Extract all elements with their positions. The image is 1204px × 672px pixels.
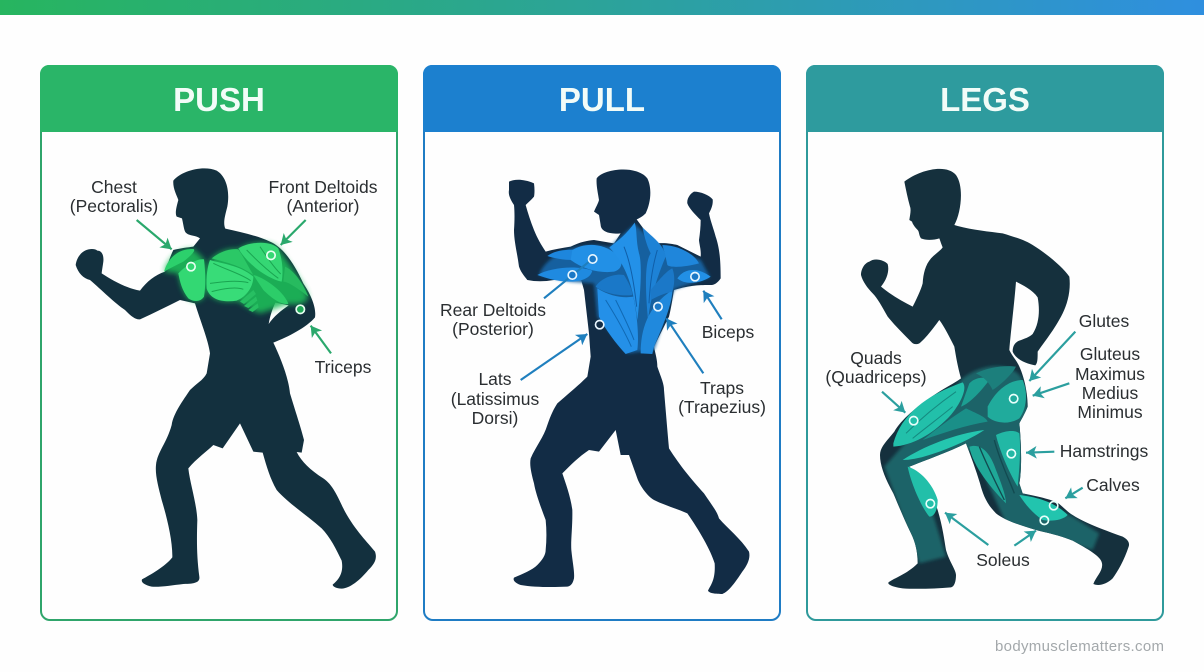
muscle glow (164, 243, 308, 313)
arrow: biceps (703, 291, 722, 319)
label: gluteus group: Maximus (1075, 364, 1145, 384)
arrow: triceps (311, 326, 331, 353)
label: quads: (Quadriceps) (825, 367, 927, 387)
panel: legs (806, 65, 1164, 620)
arrow: chest (137, 220, 172, 249)
panel frame: pull (424, 66, 780, 620)
label: hamstrings: Hamstrings (1060, 441, 1148, 461)
back muscle underlay (539, 224, 710, 353)
label: gluteus group: Medius (1082, 383, 1138, 403)
body silhouette (76, 168, 376, 589)
label: chest: (Pectoralis) (70, 196, 158, 216)
body silhouette (509, 170, 749, 594)
muscle: pectoral (206, 249, 253, 301)
muscle: hamstrings (969, 431, 1020, 503)
muscle: serratus (240, 290, 259, 312)
muscle: trapezius (609, 223, 666, 320)
muscle: glutes (976, 366, 1026, 423)
watermark: bodymusclematters.com (995, 638, 1164, 655)
muscle: left chest and shoulder (164, 249, 205, 301)
panel: push (40, 65, 398, 620)
panel: pull (423, 65, 781, 620)
arrow: hamstrings (1026, 448, 1054, 456)
label: lats: (Latissimus (451, 389, 539, 409)
label: quads: Quads (850, 348, 902, 368)
muscle: calves (1019, 495, 1068, 521)
muscle: quadriceps (893, 378, 989, 460)
arrow: lats (521, 334, 587, 380)
label: traps: (Trapezius) (678, 397, 766, 417)
muscle: front deltoid (238, 243, 283, 282)
muscle: right shoulder and biceps (662, 245, 711, 283)
label: biceps: Biceps (702, 322, 755, 342)
label: front deltoids: (Anterior) (287, 196, 359, 216)
arrow: soleus right (1014, 531, 1036, 546)
muscle: rear deltoid (571, 245, 621, 272)
marker: rear deltoid lower (568, 271, 576, 279)
arrow: rear deltoids (544, 262, 589, 298)
marker: lats (595, 320, 604, 329)
marker: hamstrings (1007, 449, 1015, 458)
label: front deltoids: Front Deltoids (269, 177, 378, 197)
header: push (40, 65, 398, 132)
marker: chest (187, 262, 195, 271)
arrow: front deltoid (281, 220, 306, 245)
muscle: front shin (908, 467, 938, 517)
marker: calves (1049, 501, 1058, 510)
arrow: traps (666, 318, 703, 373)
body silhouette (861, 169, 1129, 589)
arrow: quads (882, 392, 905, 413)
label: soleus: Soleus (976, 550, 1030, 570)
marker: traps (654, 302, 662, 311)
label: rear deltoids: (Posterior) (452, 319, 534, 339)
header: pull (423, 65, 781, 132)
muscle: left arm (537, 250, 592, 282)
arrow: glutes (1029, 332, 1075, 381)
muscle: latissimus left (596, 275, 638, 354)
marker: soleus rear (1040, 516, 1048, 524)
arrow: gluteus group (1033, 383, 1069, 396)
figure: pull silhouette with back muscles (509, 170, 749, 594)
label: calves: Calves (1086, 475, 1140, 495)
heading: LEGS: LEGS (940, 81, 1030, 118)
label: gluteus group: Gluteus (1080, 344, 1140, 364)
label: triceps: Triceps (315, 357, 372, 377)
label: glutes: Glutes (1079, 311, 1130, 331)
marker: soleus front (926, 499, 934, 508)
gap between arm and torso (269, 303, 289, 324)
marker: triceps (296, 305, 304, 313)
label: chest: Chest (91, 177, 137, 197)
muscle: latissimus right (641, 268, 674, 354)
marker: biceps (691, 272, 699, 281)
heading: PULL: PULL (559, 81, 645, 118)
arrow: calves (1065, 488, 1083, 498)
label: traps: Traps (700, 378, 744, 398)
top gradient bar (0, 0, 1204, 15)
label: gluteus group: Minimus (1077, 402, 1143, 422)
label: lats: Dorsi) (472, 408, 518, 428)
leg shading (884, 366, 1099, 563)
heading: PUSH: PUSH (173, 81, 265, 118)
panel frame: legs (807, 66, 1163, 620)
header: legs (806, 65, 1164, 132)
figure: push silhouette with chest, shoulder and triceps muscles (76, 168, 376, 589)
marker: quads (909, 416, 918, 425)
muscle: upper arm (253, 267, 308, 304)
marker: front deltoid (267, 251, 275, 259)
marker: glutes (1009, 394, 1018, 403)
label: rear deltoids: Rear Deltoids (440, 300, 546, 320)
panel frame: push (41, 66, 397, 620)
figure: legs silhouette with leg muscles (861, 169, 1129, 589)
label: lats: Lats (478, 369, 512, 389)
marker: rear deltoid upper (588, 255, 597, 263)
arrow: soleus left (945, 513, 988, 545)
